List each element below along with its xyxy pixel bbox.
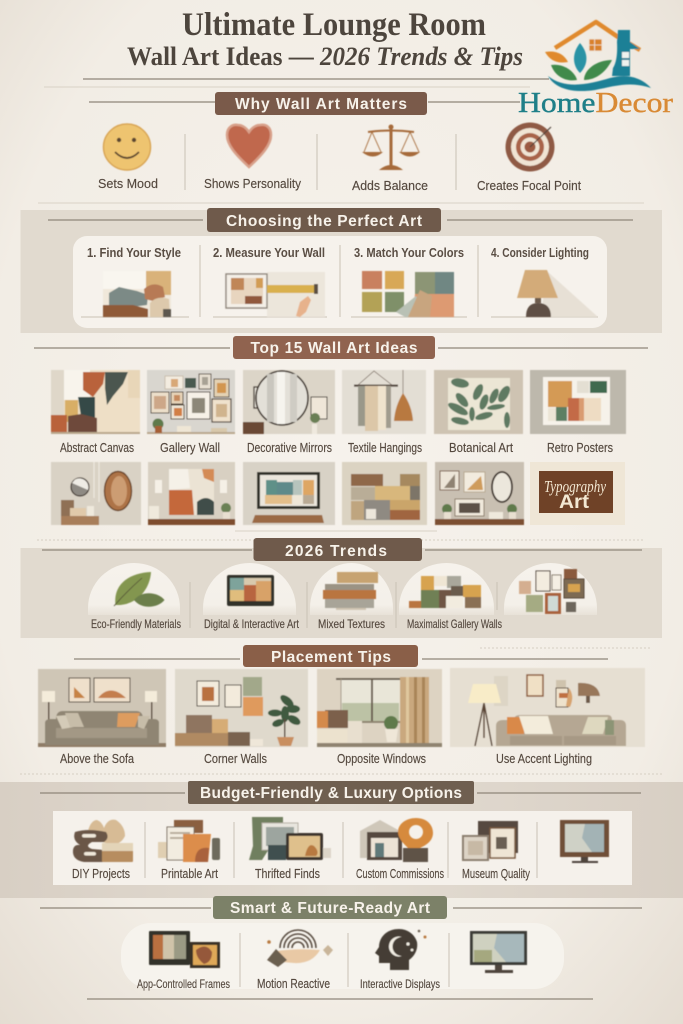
label: DIY Projects: DIY Projects — [72, 866, 130, 881]
panel: Budget-Friendly and Luxury Options — [0, 781, 683, 898]
icon: Thrifted Finds — [249, 817, 331, 860]
panel: Choosing the Perfect Art — [20, 208, 662, 333]
label: Sets Mood: Sets Mood — [98, 176, 158, 191]
label: Thrifted Finds: Thrifted Finds — [255, 866, 320, 881]
label: Custom Commissions: Custom Commissions — [356, 866, 444, 881]
art: Gallery Wall — [147, 370, 235, 434]
label: Textile Hangings: Textile Hangings — [348, 440, 422, 455]
step 1: Find Your Style: 1. Find Your Style — [87, 245, 181, 260]
heading badge: Placement Tips — [243, 645, 418, 667]
icon: head with sparkle — [375, 929, 426, 970]
scene: Use Accent Lighting — [450, 668, 645, 747]
icon: digital tablet — [227, 575, 274, 606]
step 4: Consider Lighting: 4. Consider Lighting — [491, 245, 589, 260]
heading badge: 2026 Trends — [254, 538, 422, 561]
label: Digital & Interactive Art: Digital & Interactive Art — [204, 617, 300, 631]
art: Mirrors and wood — [51, 462, 141, 525]
heading badge: 2026 Trends: 2026 Trends — [285, 543, 387, 560]
step 2: Measure Your Wall — [213, 245, 325, 317]
title: Ultimate Lounge Room — [182, 7, 486, 43]
card: four steps — [73, 236, 607, 328]
art: Wall with console — [435, 462, 524, 525]
art: Typography Art: Art — [559, 492, 590, 513]
icon: Museum Quality — [463, 821, 518, 860]
label: Botanical Art: Botanical Art — [449, 440, 513, 455]
heading badge: Smart & Future-Ready Art: Smart & Future-Ready Art — [230, 900, 430, 917]
icon: leaves — [114, 572, 164, 607]
heading badge: Choosing the Perfect Art — [207, 208, 441, 232]
art: Typography Art: Typography — [544, 477, 606, 496]
step 4: Consider Lighting — [491, 245, 598, 317]
title: Wall Art Ideas — 2026 Trends & Tips — [127, 42, 523, 71]
logo: HomeDecor — [518, 22, 673, 119]
heading badge: Budget-Friendly & Luxury Options — [188, 781, 474, 804]
icon: Printable Art — [158, 820, 220, 862]
label: App-Controlled Frames: App-Controlled Frames — [137, 977, 230, 991]
icon: DIY Projects — [73, 820, 133, 862]
label: Decorative Mirrors: Decorative Mirrors — [247, 440, 332, 455]
label: Mixed Textures: Mixed Textures — [318, 617, 385, 631]
icon: app-controlled frames — [149, 931, 220, 968]
section: Placement Tips — [38, 645, 645, 766]
logo icon: house and leaves — [545, 22, 651, 91]
icon: stacked textures — [323, 572, 378, 610]
label: Creates Focal Point: Creates Focal Point — [477, 178, 581, 193]
label: Use Accent Lighting: Use Accent Lighting — [496, 751, 592, 766]
art: Abstract with sconces — [148, 462, 235, 525]
heading badge: Placement Tips: Placement Tips — [271, 649, 391, 666]
art: Textile Hangings — [342, 370, 426, 434]
title — [127, 7, 523, 71]
panel: 2026 Trends — [20, 538, 662, 638]
icon: mosaic gallery — [409, 576, 481, 608]
icon: balance scales — [362, 124, 420, 170]
icon: motion reactive hand — [267, 930, 333, 967]
step 3: Match Your Colors — [354, 245, 464, 317]
section: Top 15 Wall Art Ideas — [34, 336, 648, 525]
art: Digital frame — [243, 462, 335, 525]
scene: Opposite Windows — [317, 669, 442, 747]
label: Museum Quality: Museum Quality — [462, 866, 530, 881]
label: Opposite Windows: Opposite Windows — [337, 751, 426, 766]
heading badge: Top 15 Wall Art Ideas — [233, 336, 435, 359]
heading badge: Budget-Friendly & Luxury Options: Budget-Friendly & Luxury Options — [200, 785, 462, 802]
heading badge: Why Wall Art Matters — [215, 92, 427, 115]
label: Shows Personality: Shows Personality — [204, 176, 301, 191]
art: Decorative Mirrors — [243, 370, 335, 434]
card: options — [53, 811, 632, 885]
art: Typography Art — [530, 462, 625, 525]
label: Motion Reactive: Motion Reactive — [257, 976, 330, 991]
step 2: Measure Your Wall: 2. Measure Your Wall — [213, 245, 325, 260]
label: Printable Art: Printable Art — [161, 866, 218, 881]
art: Mixed material wall — [342, 462, 427, 525]
label: Above the Sofa: Above the Sofa — [60, 751, 135, 766]
label: Corner Walls: Corner Walls — [204, 751, 267, 766]
step 1: Find Your Style — [87, 245, 181, 317]
card: smart art row — [121, 923, 564, 991]
art: Retro Posters — [530, 370, 626, 434]
art: Botanical Art — [434, 370, 523, 434]
icon: gallery cluster — [519, 569, 584, 614]
icon: smiley — [104, 124, 150, 170]
section: Smart and Future-Ready Art — [40, 896, 642, 991]
label: Retro Posters: Retro Posters — [547, 440, 613, 455]
heading badge: Why Wall Art Matters: Why Wall Art Matters — [235, 96, 407, 113]
label: Abstract Canvas: Abstract Canvas — [60, 440, 134, 455]
icon: Custom Commissions — [360, 818, 433, 862]
art: Abstract Canvas — [51, 370, 140, 434]
icon: monitor — [470, 931, 527, 973]
label: Maximalist Gallery Walls: Maximalist Gallery Walls — [407, 617, 502, 631]
scene: Corner Walls — [175, 669, 308, 747]
scene: Above the Sofa — [38, 669, 166, 747]
logo: HomeDecor: HomeDecor — [518, 87, 673, 119]
heading badge: Choosing the Perfect Art: Choosing the Perfect Art — [226, 213, 422, 230]
icon: heart — [227, 125, 271, 167]
label: Gallery Wall: Gallery Wall — [160, 440, 220, 455]
label: Adds Balance: Adds Balance — [352, 178, 428, 193]
icon: monitor — [560, 820, 609, 863]
step 3: Match Your Colors: 3. Match Your Colors — [354, 245, 464, 260]
heading badge: Top 15 Wall Art Ideas: Top 15 Wall Art Ideas — [250, 340, 418, 357]
label: Interactive Displays: Interactive Displays — [360, 977, 440, 991]
heading badge: Smart & Future-Ready Art — [213, 896, 447, 919]
icon: target — [506, 122, 554, 172]
section: Why Wall Art Matters — [89, 92, 581, 193]
label: Eco-Friendly Materials: Eco-Friendly Materials — [91, 617, 181, 631]
